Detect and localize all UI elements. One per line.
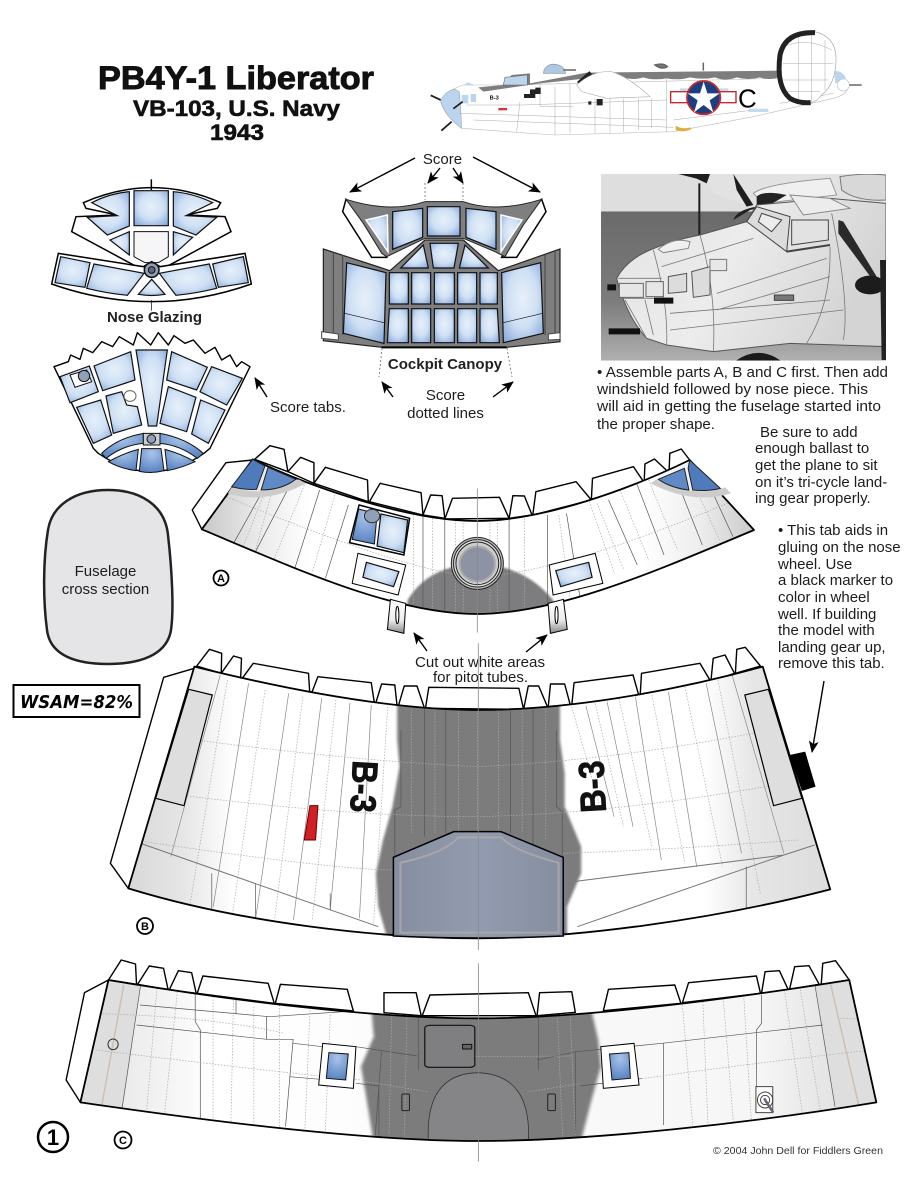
score label and arrows: Score bbox=[423, 151, 462, 168]
instruction text: assembly: • Assemble parts A, B and C first. Then add bbox=[597, 364, 888, 381]
lower band bbox=[52, 253, 251, 311]
instruction text: assembly: will aid in getting the fuselage started into bbox=[596, 398, 881, 415]
part B code right: B-3 bbox=[570, 760, 614, 814]
panel lines bbox=[459, 78, 833, 135]
title: 1943 bbox=[210, 120, 264, 145]
belly detail bbox=[677, 127, 691, 130]
WSAM badge bbox=[14, 685, 140, 717]
part C bbox=[60, 950, 887, 1163]
part B wing slots bbox=[156, 689, 802, 806]
pitot label and arrows bbox=[414, 633, 547, 686]
part A outline bbox=[202, 459, 754, 614]
fuselage cross section bbox=[44, 490, 172, 664]
aircraft side view bbox=[431, 32, 862, 135]
part B red tag bbox=[304, 806, 318, 840]
national insignia bbox=[671, 81, 736, 114]
instruction text: assembly: windshield followed by nose piece. This bbox=[596, 381, 868, 398]
part A tabs bbox=[192, 446, 690, 529]
fuselage bbox=[441, 77, 848, 135]
part C marker bbox=[114, 1132, 132, 1148]
arrow: score tabs bbox=[255, 378, 267, 397]
score tabs label: Score tabs. bbox=[270, 399, 346, 416]
tail gunner bbox=[835, 71, 846, 83]
fuselage code: B-3 bbox=[490, 96, 499, 102]
instruction text: ballast: on it’s tri-cycle land- bbox=[755, 474, 887, 491]
propeller bbox=[838, 220, 877, 278]
score dotted lines label: dotted lines bbox=[407, 405, 484, 422]
wing fairing bbox=[577, 71, 650, 98]
instruction text: ballast: enough ballast to bbox=[755, 440, 869, 457]
nose glazing bbox=[441, 89, 462, 128]
nose glazing upper piece bbox=[52, 179, 251, 473]
instruction text: assembly bbox=[596, 364, 888, 433]
instruction text: nose wheel tab: remove this tab. bbox=[778, 655, 885, 672]
instruction text: nose wheel tab: landing gear up, bbox=[778, 639, 886, 656]
fuselage cross section: Fuselage bbox=[75, 563, 136, 580]
score label and arrows bbox=[350, 151, 540, 377]
WSAM badge: WSAM=82% bbox=[20, 692, 133, 713]
instruction text: ballast bbox=[755, 424, 887, 507]
part B marker: B bbox=[141, 921, 149, 933]
part A bbox=[192, 445, 755, 634]
tail fin bbox=[779, 32, 836, 103]
score dotted lines label: Score bbox=[426, 387, 465, 404]
cockpit windows bbox=[503, 75, 527, 85]
part C tabs bbox=[66, 960, 849, 1102]
nose glazing label: Nose Glazing bbox=[107, 309, 202, 326]
pitot label and arrows: Cut out white areas bbox=[415, 654, 545, 671]
background wing and engine bbox=[703, 174, 886, 207]
canopy lower piece bbox=[322, 240, 560, 347]
part C body bbox=[82, 981, 876, 1140]
part C small details bbox=[108, 1039, 773, 1113]
fuselage nose bbox=[617, 198, 886, 352]
cockpit canopy label: Cockpit Canopy bbox=[388, 356, 503, 373]
part A blue corners bbox=[228, 459, 731, 497]
title: VB-103, U.S. Navy bbox=[133, 96, 341, 121]
cockpit canopy bbox=[322, 199, 560, 347]
part A body bbox=[204, 461, 752, 614]
instruction text: nose wheel tab: well. If building bbox=[777, 606, 876, 623]
part C hatch bbox=[425, 1025, 475, 1067]
canopy upper piece bbox=[343, 199, 546, 257]
instruction text: nose wheel tab: • This tab aids in bbox=[778, 522, 888, 539]
part A marker bbox=[214, 570, 228, 586]
part C strip seams bbox=[102, 983, 858, 1105]
instruction text: assembly: the proper shape. bbox=[597, 416, 715, 433]
top turret bbox=[543, 64, 566, 73]
engine exhaust marks bbox=[524, 88, 603, 105]
page number: 1 bbox=[47, 1125, 59, 1150]
part B body bbox=[130, 668, 829, 934]
instruction text: nose wheel tab: wheel. Use bbox=[777, 556, 852, 573]
fuselage cross section: cross section bbox=[62, 581, 149, 598]
part C windows bbox=[319, 1043, 639, 1088]
instruction text: nose wheel tab: the model with bbox=[778, 622, 875, 639]
reference photo of model nose bbox=[601, 174, 886, 361]
part B tabs bbox=[110, 647, 816, 888]
part B code left: B-3 bbox=[342, 760, 386, 814]
instruction text: ballast: ing gear properly. bbox=[755, 490, 871, 507]
part B bomb bay hatch bbox=[393, 832, 563, 938]
part B bbox=[100, 640, 855, 950]
title: PB4Y-1 Liberator bbox=[98, 60, 374, 96]
dorsal grey band bbox=[478, 71, 778, 92]
part A window frames bbox=[350, 505, 603, 595]
instruction text: nose wheel tab: color in wheel bbox=[778, 589, 870, 606]
instruction text: ballast: Be sure to add bbox=[760, 424, 858, 441]
arrow: to black tab bbox=[812, 681, 824, 752]
page number bbox=[38, 1122, 68, 1152]
instruction text: ballast: get the plane to sit bbox=[755, 457, 878, 474]
nose lower piece bbox=[54, 333, 250, 473]
instruction text: nose wheel tab: a black marker to bbox=[778, 572, 893, 589]
part C outline bbox=[80, 980, 876, 1141]
instruction text: nose wheel tab bbox=[777, 522, 901, 672]
part A pitot tabs bbox=[387, 599, 567, 633]
nose windows and guns bbox=[668, 267, 710, 297]
cockpit glazing bbox=[747, 207, 790, 252]
panel lines bbox=[618, 213, 845, 352]
part B marker bbox=[137, 918, 153, 934]
copyright: © 2004 John Dell for Fiddlers Green bbox=[713, 1145, 883, 1157]
pitot label and arrows: for pitot tubes. bbox=[433, 669, 528, 686]
part C marker: C bbox=[119, 1135, 127, 1147]
instruction text: nose wheel tab: gluing on the nose bbox=[778, 539, 901, 556]
part A marker: A bbox=[217, 573, 225, 585]
guns bbox=[431, 95, 463, 131]
upper fan bbox=[72, 179, 231, 269]
part B outline bbox=[128, 667, 830, 938]
section letter: C bbox=[738, 84, 757, 114]
part A porthole bbox=[451, 537, 503, 589]
score dotted lines label bbox=[382, 382, 513, 422]
title bbox=[98, 60, 374, 145]
